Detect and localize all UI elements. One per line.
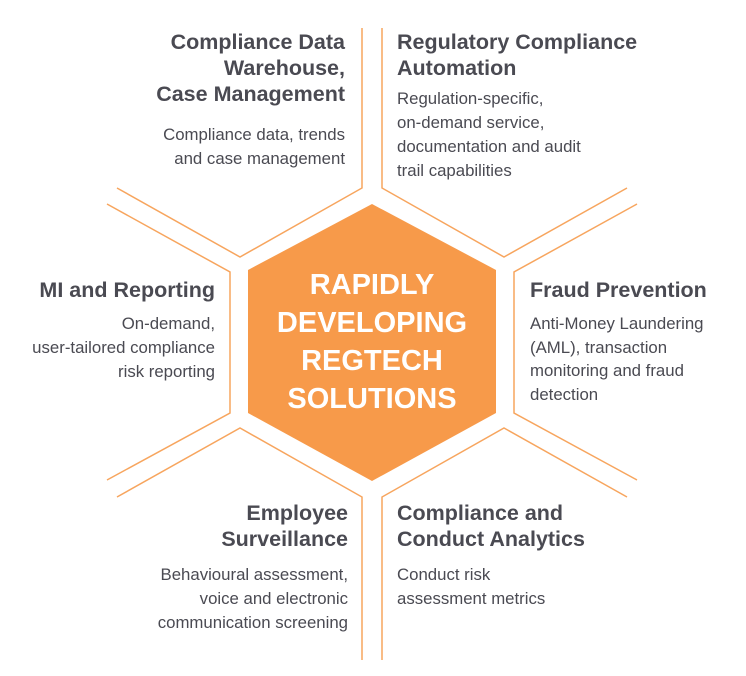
panel: regulatory compliance automation: documentation and audit	[397, 137, 581, 156]
panel: compliance and conduct analytics: Compliance and	[397, 501, 563, 525]
center title: SOLUTIONS	[287, 383, 457, 415]
center title	[277, 269, 467, 415]
panel: employee surveillance: Employee	[246, 501, 348, 525]
panel: MI and reporting: On-demand,	[122, 314, 215, 333]
panel: compliance data warehouse: Compliance data, trends	[163, 125, 345, 144]
panel: compliance and conduct analytics	[397, 501, 585, 608]
panel: regulatory compliance automation: Regulation-specific,	[397, 89, 543, 108]
panel: compliance data warehouse: Compliance Data	[171, 30, 346, 54]
panel: regulatory compliance automation	[397, 30, 637, 180]
panel: employee surveillance: Surveillance	[221, 527, 348, 551]
panel: MI and reporting: user-tailored compliance	[32, 338, 215, 357]
panel: fraud prevention: Fraud Prevention	[530, 278, 707, 302]
center hexagon	[248, 204, 496, 481]
panel: employee surveillance	[158, 501, 348, 632]
panel: regulatory compliance automation: Regulatory Compliance	[397, 30, 637, 54]
panel: regulatory compliance automation: trail capabilities	[397, 161, 512, 180]
panel: compliance data warehouse: Case Management	[156, 82, 345, 106]
panel: regulatory compliance automation: Automation	[397, 56, 516, 80]
panel: compliance and conduct analytics: assessment metrics	[397, 589, 545, 608]
panel: compliance and conduct analytics: Conduct risk	[397, 565, 491, 584]
center title: RAPIDLY	[310, 269, 434, 301]
panel: employee surveillance: Behavioural assessment,	[160, 565, 348, 584]
panel: compliance data warehouse: Warehouse,	[224, 56, 345, 80]
panel: employee surveillance: communication screening	[158, 613, 348, 632]
panel: MI and reporting	[32, 278, 215, 381]
panel: fraud prevention: (AML), transaction	[530, 338, 667, 357]
panel: fraud prevention: monitoring and fraud	[530, 361, 684, 380]
panel: regulatory compliance automation: on-demand service,	[397, 113, 544, 132]
panel: compliance data warehouse	[156, 30, 346, 168]
panel: employee surveillance: voice and electronic	[200, 589, 348, 608]
panel: fraud prevention	[530, 278, 707, 404]
center title: REGTECH	[301, 345, 443, 377]
panel: fraud prevention: detection	[530, 385, 598, 404]
center title: DEVELOPING	[277, 307, 467, 339]
panel: MI and reporting: risk reporting	[118, 362, 215, 381]
panel: fraud prevention: Anti-Money Laundering	[530, 314, 704, 333]
panel: compliance data warehouse: and case management	[174, 149, 345, 168]
panel: MI and reporting: MI and Reporting	[39, 278, 215, 302]
panel: compliance and conduct analytics: Conduct Analytics	[397, 527, 585, 551]
